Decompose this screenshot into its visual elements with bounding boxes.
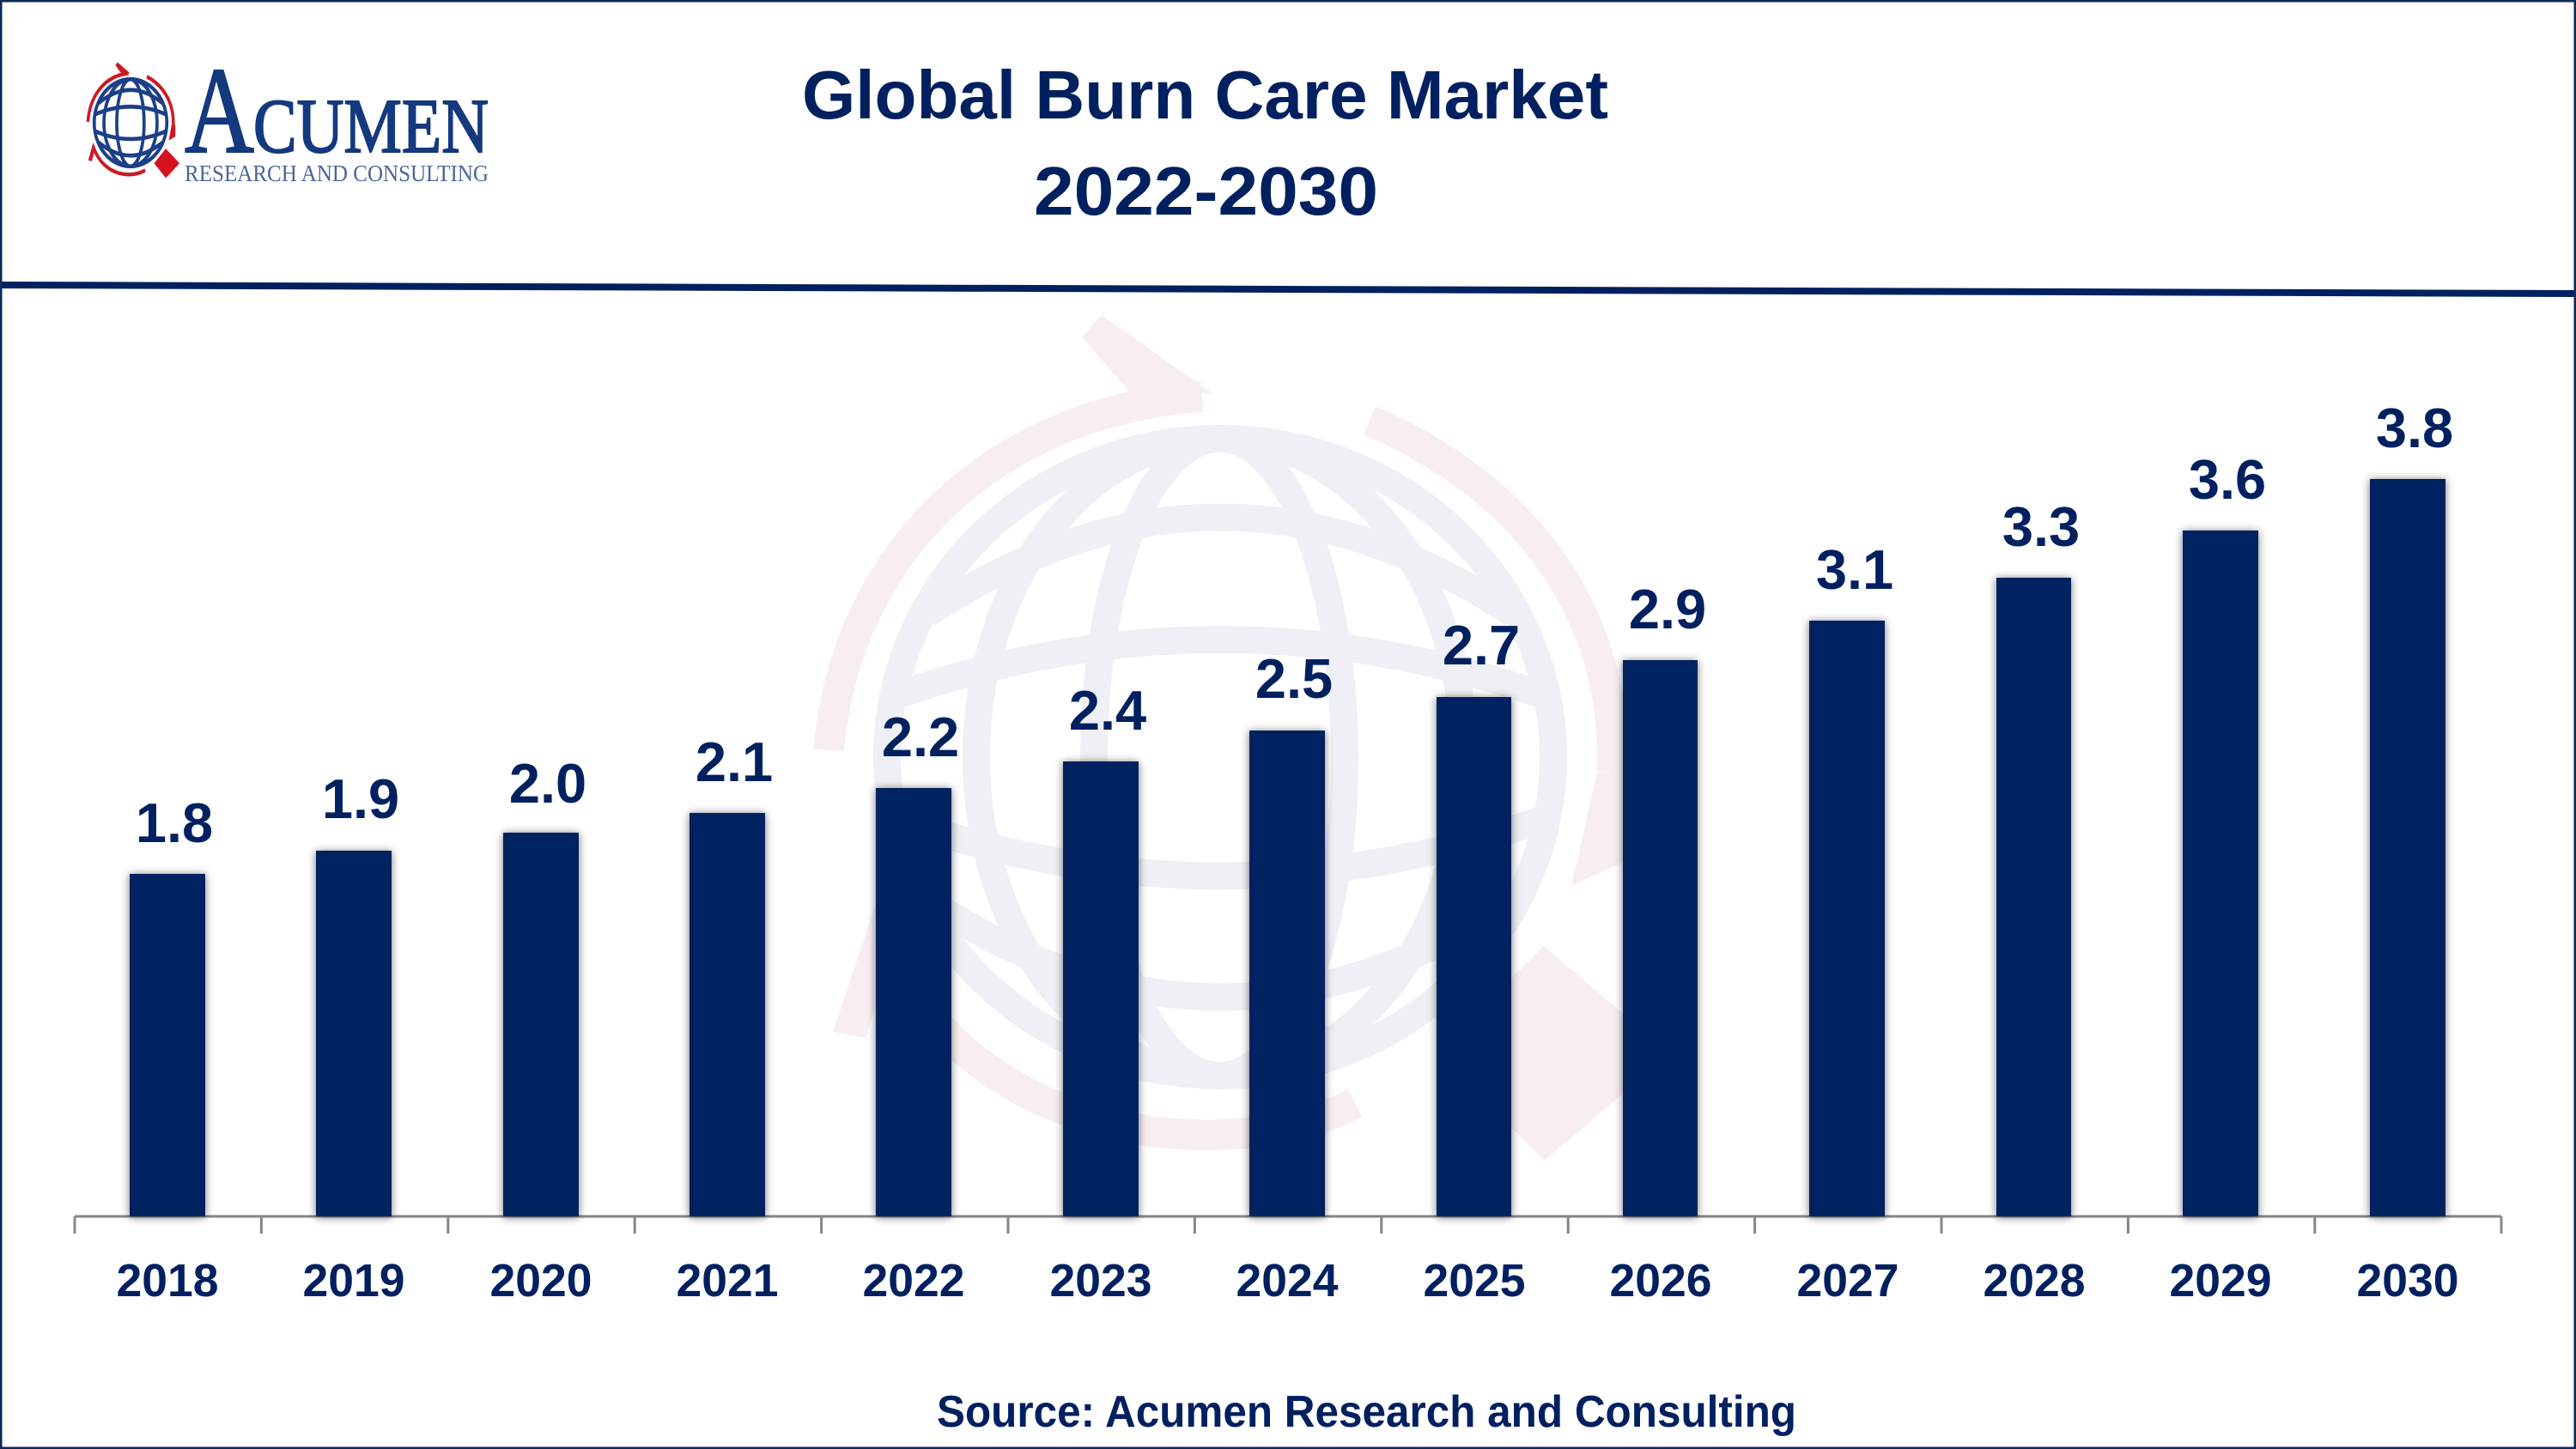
bar chart [75,397,2501,1307]
logo: Acumen Research and Consulting [86,62,488,182]
logo wordmark: Acumen: A [185,43,254,179]
value labels: 3.8 [2376,397,2453,459]
title: 2022-2030 [1034,153,1378,229]
logo icon: globe with red arrows [88,62,179,178]
value labels: 2.0 [509,752,586,815]
watermark: globe logo [829,315,1670,1161]
value labels [136,397,2453,854]
value labels: 2.7 [1443,614,1520,676]
year labels: 2029 [2169,1255,2272,1307]
year labels: 2026 [1609,1255,1712,1307]
year labels: 2021 [677,1255,778,1307]
title [802,57,1608,229]
year labels: 2022 [862,1255,965,1307]
watermark: red orbit arrows [829,315,1631,1135]
value labels: 1.8 [136,791,213,854]
logo wordmark: Acumen [185,43,489,179]
year labels: 2023 [1049,1255,1152,1307]
year labels: 2027 [1796,1255,1899,1307]
value labels: 2.5 [1255,647,1333,710]
value labels: 2.1 [696,731,773,793]
value labels: 3.6 [2189,448,2266,511]
logo tagline: RESEARCH AND CONSULTING [185,161,489,186]
year labels: 2020 [489,1255,592,1307]
value labels: 2.4 [1069,679,1146,742]
year labels: 2028 [1984,1255,2085,1307]
value labels: 2.9 [1629,578,1706,640]
year labels: 2030 [2356,1255,2459,1307]
value labels: 3.3 [2002,495,2080,558]
header divider line [0,282,2576,297]
watermark: globe grid [884,439,1556,1076]
year labels: 2019 [302,1255,405,1307]
value labels: 3.1 [1816,538,1893,601]
year labels: 2018 [117,1255,218,1307]
bars [130,479,2445,1216]
value labels: 1.9 [322,767,399,830]
watermark: red diamond [1437,946,1670,1161]
year labels: 2024 [1236,1255,1338,1307]
x axis [75,1216,2501,1234]
value labels: 2.2 [882,706,959,768]
logo wordmark: Acumen: CUMEN [253,84,489,169]
source note: Source: Acumen Research and Consulting [937,1387,1796,1437]
title: Global Burn Care Market [802,57,1608,133]
year labels [117,1255,2459,1307]
year labels: 2025 [1424,1255,1525,1307]
